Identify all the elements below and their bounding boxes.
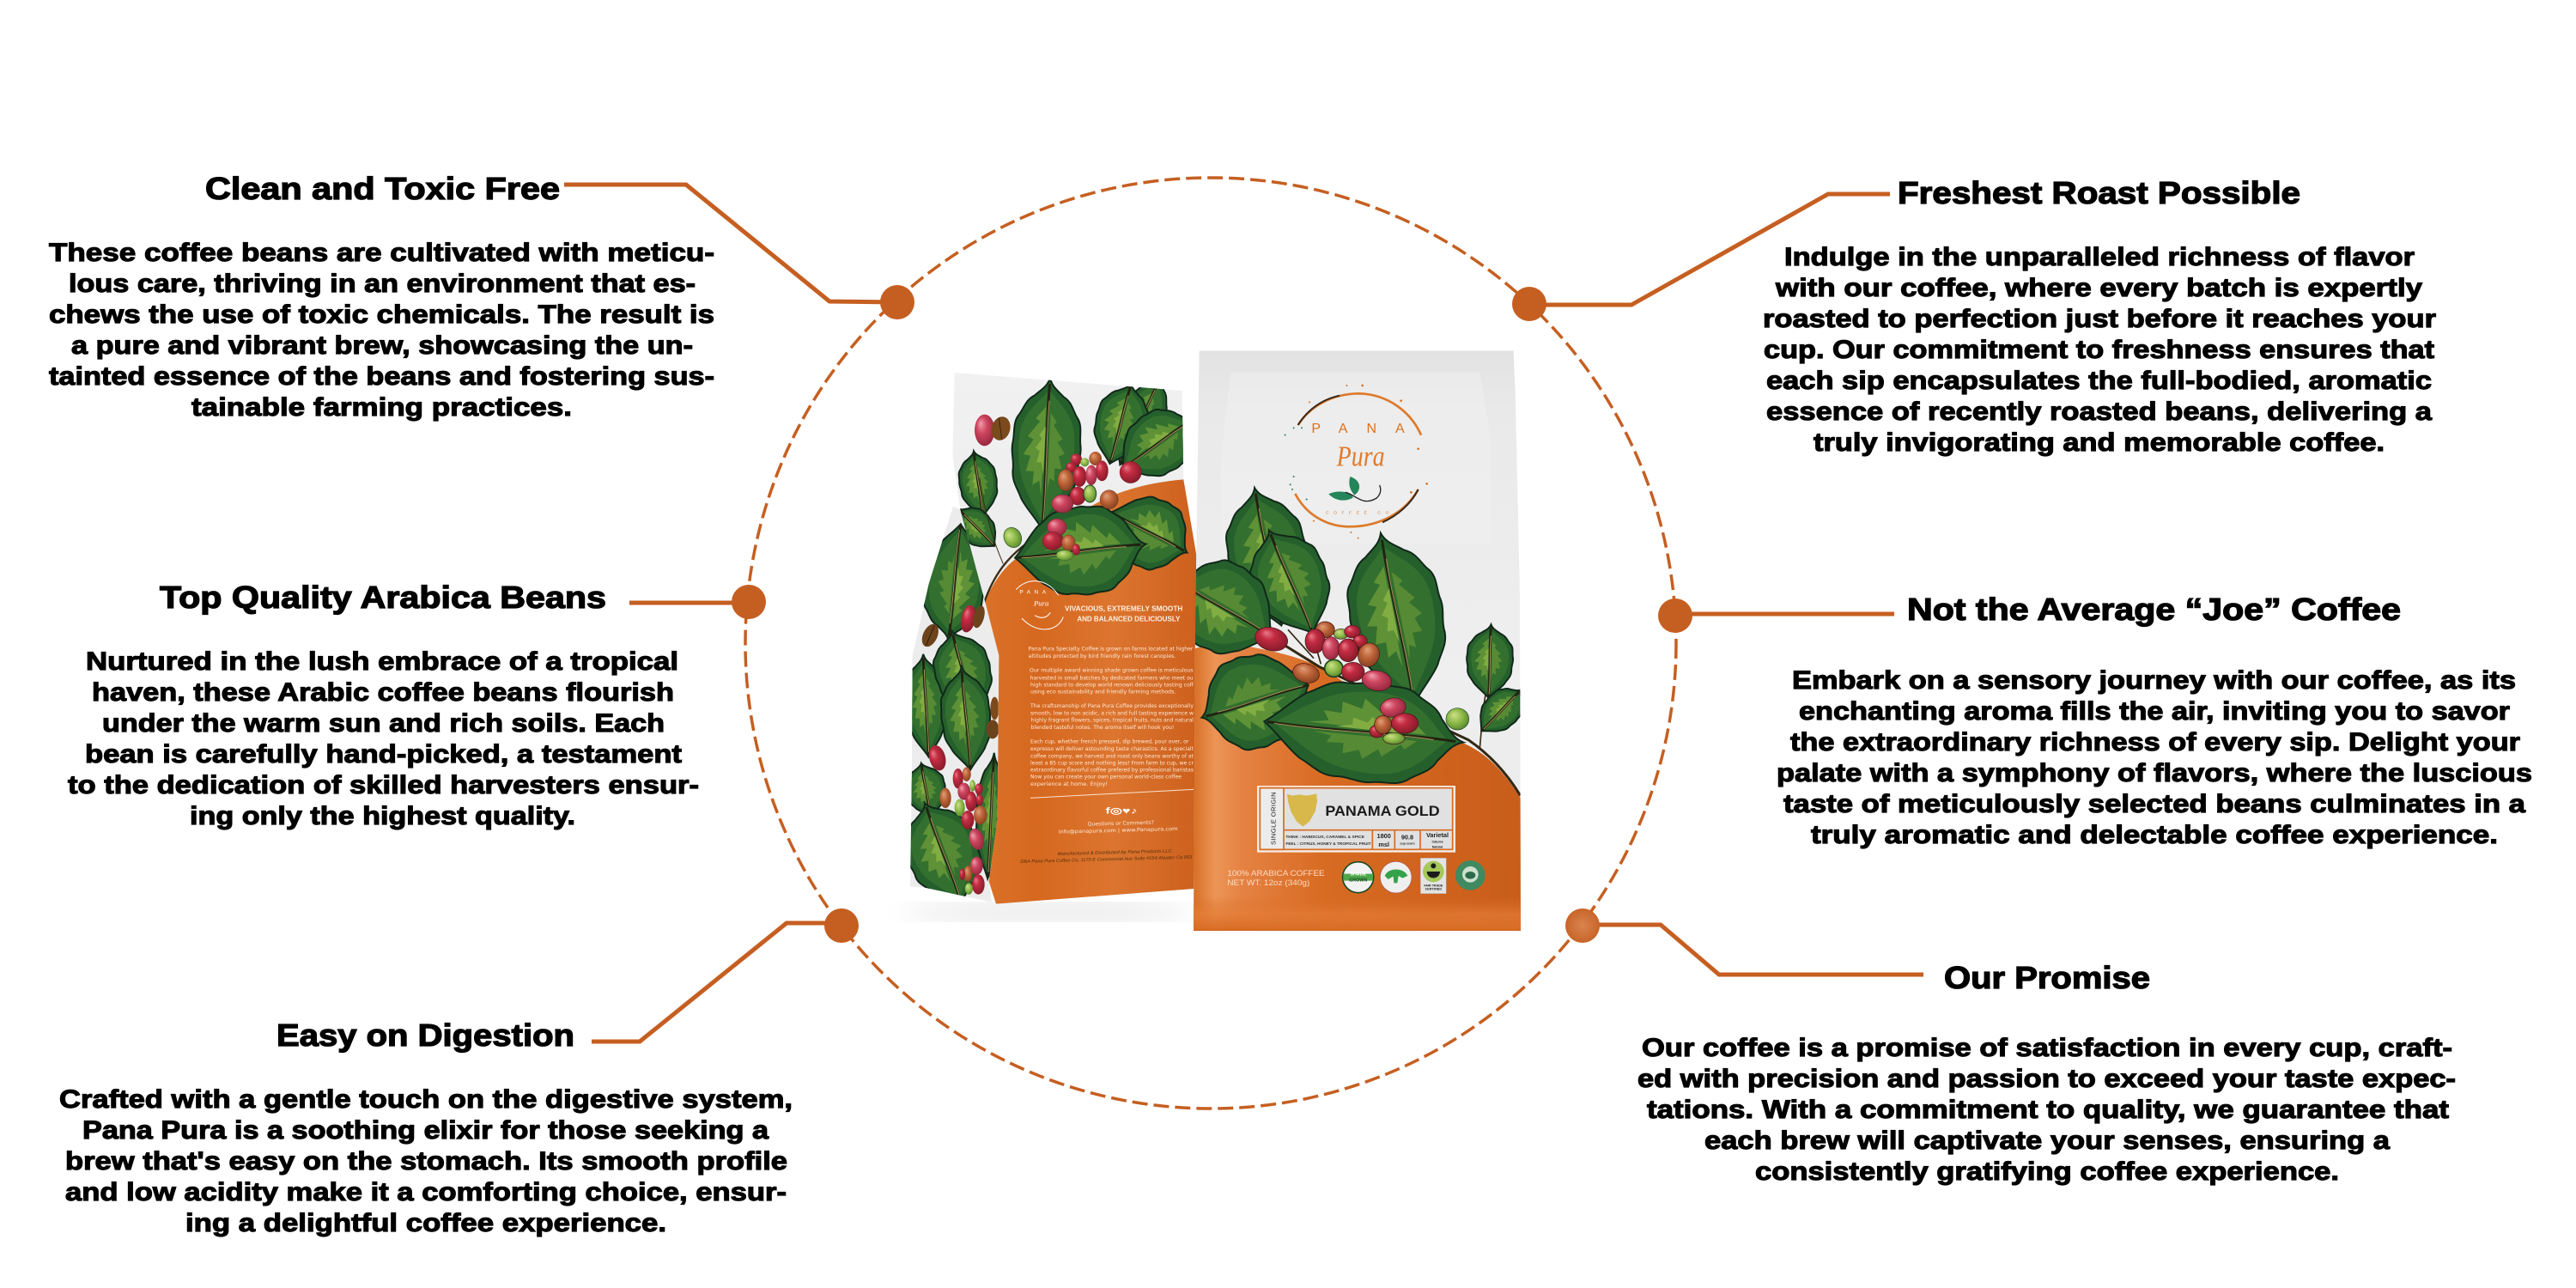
node dot xyxy=(732,585,766,619)
body text: ing a delightful coffee experience. xyxy=(185,1209,666,1237)
heading: Top Quality Arabica Beans xyxy=(160,580,606,615)
connector line xyxy=(1529,194,1890,305)
net weight text: NET WT. 12oz (340g) xyxy=(1227,878,1309,887)
body text: a pure and vibrant brew, showcasing the un- xyxy=(71,331,693,360)
back headline: VIVACIOUS, EXTREMELY SMOOTH xyxy=(1065,605,1182,613)
body text: taste of meticulously selected beans culminates in a xyxy=(1783,790,2525,818)
body text: roasted to perfection just before it reaches your xyxy=(1763,305,2436,333)
back description paragraphs: Pana Pura Specialty Coffee is grown on farms located at higher xyxy=(1029,646,1194,652)
body text: tainable farming practices. xyxy=(191,393,572,422)
body text: palate with a symphony of flavors, where the luscious xyxy=(1777,759,2532,787)
connector line xyxy=(592,923,841,1042)
back description paragraphs: Now you can create your own personal world-class coffee xyxy=(1030,775,1182,781)
body text: Crafted with a gentle touch on the digestive system, xyxy=(59,1085,793,1114)
back description paragraphs: experience at home. Enjoy! xyxy=(1030,781,1108,787)
label: Panama Gold: Natural xyxy=(1432,846,1443,849)
back description paragraphs: highly fragrant flowers, spices, tropical fruits, nuts and natural xyxy=(1031,718,1194,724)
back contact details xyxy=(1059,820,1178,835)
back description paragraphs: high standard to develop world renown deliciously tasting coff xyxy=(1030,682,1194,688)
label: Panama Gold: FEEL : CITRUS, HONEY & TROPICAL FRUIT xyxy=(1285,841,1371,846)
back logo text: Pura xyxy=(1033,598,1048,607)
body text xyxy=(1637,1034,2456,1186)
back description paragraphs: smooth, low to non acidic, a rich and full tasting experience w xyxy=(1030,710,1194,716)
connector line xyxy=(564,185,897,302)
label: Panama Gold: Varietal xyxy=(1426,831,1449,839)
callout: Not the Average Joe Coffee xyxy=(1658,592,2532,849)
certification badges xyxy=(1343,858,1485,894)
node dot xyxy=(1565,908,1600,943)
body text xyxy=(59,1085,793,1237)
body text: haven, these Arabic coffee beans flourish xyxy=(92,678,674,707)
body text: and low acidity make it a comforting choice, ensur- xyxy=(65,1178,787,1206)
back description paragraphs xyxy=(1029,646,1194,787)
side gusset xyxy=(910,507,999,902)
body text: Nurtured in the lush embrace of a tropical xyxy=(86,647,678,676)
label: Panama Gold: Caturra xyxy=(1431,841,1443,844)
product: back of coffee bag xyxy=(910,373,1197,904)
back description paragraphs: blended tasteful notes. The aroma itself will hook you! xyxy=(1031,725,1174,731)
body text: truly invigorating and memorable coffee. xyxy=(1814,428,2385,457)
body text: bean is carefully hand-picked, a testament xyxy=(85,740,682,769)
label: Panama Gold: msl xyxy=(1378,841,1389,848)
label: Panama Gold: 90.8 xyxy=(1401,833,1413,841)
back description paragraphs: The craftsmanship of Pana Pura Coffee provides exceptionally xyxy=(1030,703,1194,709)
body text: lous care, thriving in an environment that es- xyxy=(69,270,696,298)
body text xyxy=(1763,243,2436,457)
back description paragraphs: coffee company, we harvest and roast only beans worthy of at xyxy=(1030,753,1194,759)
white back logo xyxy=(1016,581,1063,629)
body text: the extraordinary richness of every sip. Delight your xyxy=(1790,728,2520,756)
back description paragraphs: Our multiple award winning shade grown coffee is meticulous xyxy=(1030,668,1194,674)
callout: Our Promise xyxy=(1565,908,2456,1186)
back headline xyxy=(1065,606,1182,622)
social icons: f◎♥♪ xyxy=(1105,807,1138,817)
body text: cup. Our commitment to freshness ensures that xyxy=(1764,336,2434,364)
label: Panama Gold: cup score xyxy=(1400,841,1415,845)
callout: Top Quality Arabica Beans xyxy=(68,580,766,830)
callout: Freshest Roast Possible xyxy=(1512,175,2436,457)
heading: Not the Average “Joe” Coffee xyxy=(1907,592,2401,627)
heading: Freshest Roast Possible xyxy=(1898,175,2300,210)
net weight text: 100% ARABICA COFFEE xyxy=(1227,869,1325,878)
heading: Easy on Digestion xyxy=(276,1018,574,1053)
body text: Indulge in the unparalleled richness of flavor xyxy=(1784,243,2415,271)
node dot xyxy=(1658,598,1692,633)
dashed circle xyxy=(745,178,1676,1109)
body text: essence of recently roasted beans, delivering a xyxy=(1766,398,2432,426)
back description paragraphs: Each cup, whether french pressed, dip brewed, pour over, or xyxy=(1030,739,1189,745)
manufacturer text: Manufactured & Distributed by Pana Products LLC xyxy=(1058,849,1172,857)
logo: Pana Pura Coffee Co: PANA xyxy=(1311,422,1405,436)
body text: truly aromatic and delectable coffee experience. xyxy=(1811,821,2498,849)
label: Panama Gold: THINK : HABISCUS, CARAMEL & SPICE xyxy=(1285,835,1364,839)
body text: each sip encapsulates the full-bodied, aromatic xyxy=(1766,367,2432,395)
label: Panama Gold: SINGLE ORIGIN xyxy=(1269,792,1277,845)
body text: Embark on a sensory journey with our coffee, as its xyxy=(1792,666,2516,695)
back description paragraphs: least a 85 cup score and nothing less! From farm to cup, we cr xyxy=(1030,761,1194,767)
body text: each brew will captivate your senses, ensuring a xyxy=(1704,1127,2390,1155)
coffee berries xyxy=(1253,622,1469,744)
heading: Clean and Toxic Free xyxy=(205,171,560,206)
body text: Pana Pura is a soothing elixir for those seeking a xyxy=(82,1116,769,1145)
body text: These coffee beans are cultivated with meticu- xyxy=(49,239,714,267)
connector line xyxy=(1675,611,1894,617)
callout: Clean and Toxic Free xyxy=(49,171,914,422)
body text: tations. With a commitment to quality, we guarantee that xyxy=(1647,1096,2449,1124)
body text: tainted essence of the beans and fostering sus- xyxy=(49,362,714,391)
back description paragraphs: harvested in small batches by dedicated farmers who meet ou xyxy=(1030,675,1194,681)
heading: Our Promise xyxy=(1944,960,2150,995)
node dot xyxy=(1512,287,1546,321)
certification badges: FAIR TRADE xyxy=(1424,884,1443,887)
branch and leaves illustration xyxy=(1152,480,1534,796)
body text: under the warm sun and rich soils. Each xyxy=(102,709,665,738)
front panel of back bag xyxy=(953,373,1197,904)
body text: brew that's easy on the stomach. Its smooth profile xyxy=(65,1147,787,1176)
net weight text xyxy=(1227,869,1325,887)
shadow under the bags xyxy=(902,903,1194,920)
back logo text: PANA xyxy=(1019,590,1050,596)
back description paragraphs: using eco sustainability and friendly farming methods. xyxy=(1030,689,1176,695)
body text: enchanting aroma fills the air, inviting you to savor xyxy=(1799,697,2510,726)
manufacturer text xyxy=(1020,848,1192,863)
back contact details: Questions or Comments? xyxy=(1088,820,1154,828)
manufacturer text: DBA Pana Pura Coffee Co, 1170 E Commercial Ave Suite #154 Atwater Ca 953 xyxy=(1020,855,1192,865)
node dot xyxy=(824,908,859,943)
body text xyxy=(1777,666,2532,849)
callout: Easy on Digestion xyxy=(59,908,859,1237)
body text: ing only the highest quality. xyxy=(190,802,575,830)
body text: with our coffee, where every batch is expertly xyxy=(1775,274,2422,302)
product: front of coffee bag xyxy=(1194,350,1521,931)
body text: chews the use of toxic chemicals. The result is xyxy=(49,301,714,329)
body text: Our coffee is a promise of satisfaction in every cup, craft- xyxy=(1642,1034,2452,1062)
back description paragraphs: altitudes protected by bird friendly rain forest canopies. xyxy=(1029,653,1176,659)
certification badges: GROWN xyxy=(1349,878,1367,884)
certification badges: SHADE xyxy=(1350,872,1366,877)
connector line xyxy=(629,601,749,605)
body text: ed with precision and passion to exceed your taste expec- xyxy=(1637,1065,2456,1093)
body text xyxy=(68,647,699,830)
back description paragraphs: expresso will deliver astounding taste charastics. As a specialt xyxy=(1030,746,1194,752)
logo: Pana Pura Coffee Co xyxy=(1285,385,1428,539)
body text: consistently gratifying coffee experience. xyxy=(1755,1157,2339,1186)
bag body xyxy=(1192,349,1524,933)
body text xyxy=(49,239,714,422)
back description paragraphs: extraordinary flavorful coffee prefered by professional baristas xyxy=(1030,768,1194,774)
logo: Pana Pura Coffee Co: Pura xyxy=(1336,441,1385,473)
label: Panama Gold xyxy=(1257,786,1455,853)
jaguar head icon xyxy=(1287,793,1317,827)
certification badges: CERTIFIED xyxy=(1425,888,1442,891)
node dot xyxy=(880,285,914,319)
label: Panama Gold: 1800 xyxy=(1377,832,1391,840)
label: Panama Gold: PANAMA GOLD xyxy=(1325,803,1440,819)
logo: Pana Pura Coffee Co: COFFEE CO xyxy=(1326,511,1388,516)
body text: to the dedication of skilled harvesters ensur- xyxy=(68,771,699,799)
back contact details: info@panapura.com | www.Panapura.com xyxy=(1059,826,1178,835)
connector line xyxy=(1583,925,1923,975)
back headline: AND BALANCED DELICIOUSLY xyxy=(1077,614,1181,623)
back logo text xyxy=(1020,590,1048,606)
